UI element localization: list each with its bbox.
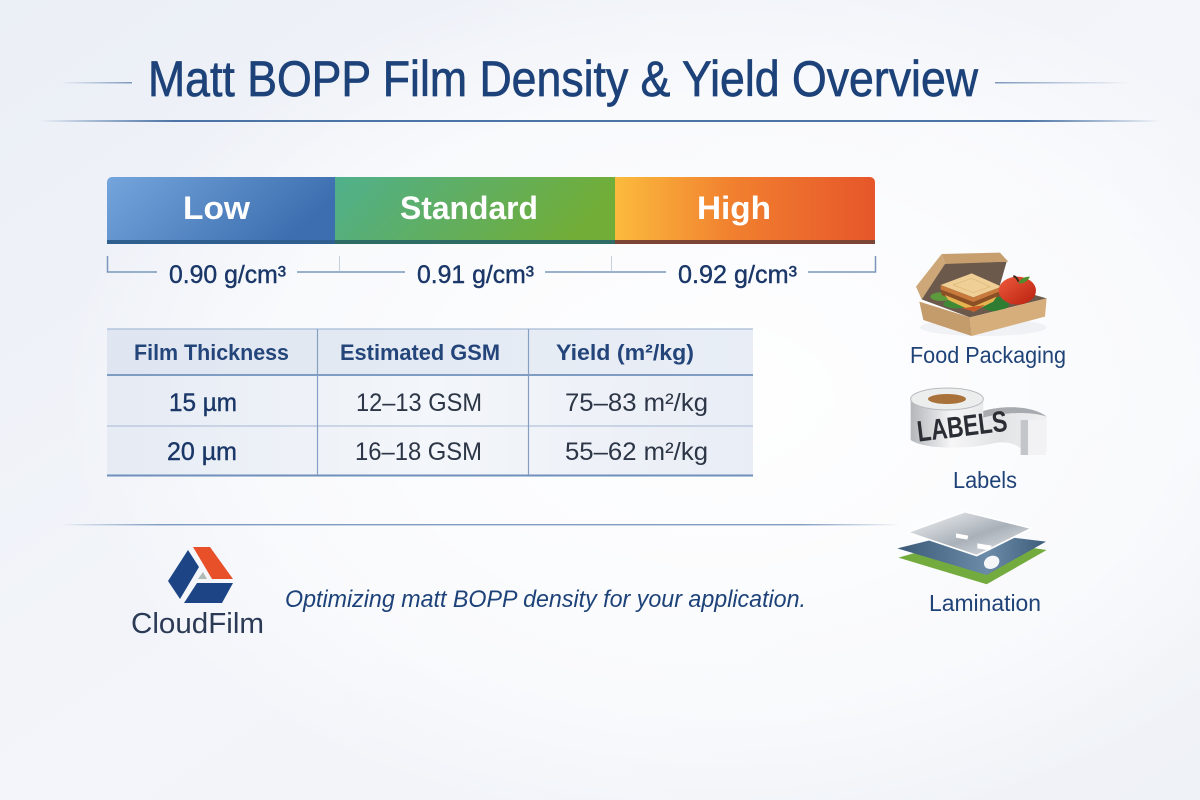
label: lamination: Lamination	[929, 590, 1041, 616]
icon: labels roll: LABELS	[915, 405, 1009, 449]
logo: CloudFilm	[131, 547, 264, 640]
segment: high	[615, 177, 875, 244]
icon: lamination layers	[897, 512, 1047, 584]
table row: 15 µm: 75–83 m²/kg	[565, 389, 708, 417]
segment: high: High	[697, 190, 771, 226]
segment: low: Low	[183, 190, 250, 226]
value: 0.90: 0.90 g/cm³	[169, 261, 286, 289]
segment: standard: Standard	[400, 190, 538, 226]
table row: 20 µm	[167, 438, 708, 466]
table header	[134, 340, 694, 365]
table row: 15 µm	[169, 389, 708, 417]
icon: food packaging	[916, 253, 1047, 336]
table row: 20 µm: 55–62 m²/kg	[565, 438, 708, 466]
density value bracket	[108, 256, 876, 289]
table row: 15 µm: 15 µm	[169, 389, 237, 417]
density scale bar	[107, 177, 875, 244]
icon: labels roll	[911, 388, 1047, 455]
table row: 15 µm: 12–13 GSM	[356, 389, 482, 417]
segment: low	[107, 177, 335, 244]
value: 0.91: 0.91 g/cm³	[417, 261, 534, 289]
table header: Yield (m²/kg)	[556, 340, 694, 365]
segment: standard	[335, 177, 615, 244]
title: Matt BOPP Film Density & Yield Overview	[148, 51, 979, 107]
table header: Estimated GSM	[340, 340, 500, 365]
logo: CloudFilm: CloudFilm	[131, 608, 264, 640]
table row: 20 µm: 16–18 GSM	[355, 438, 482, 466]
value: 0.92: 0.92 g/cm³	[678, 261, 797, 289]
table row: 20 µm: 20 µm	[167, 438, 237, 466]
table header: Film Thickness	[134, 340, 289, 365]
tagline: Optimizing matt BOPP density for your application.	[285, 586, 806, 613]
label: food packaging: Food Packaging	[910, 342, 1066, 368]
table: thickness, GSM, yield	[107, 329, 753, 476]
label: labels: Labels	[953, 467, 1017, 493]
